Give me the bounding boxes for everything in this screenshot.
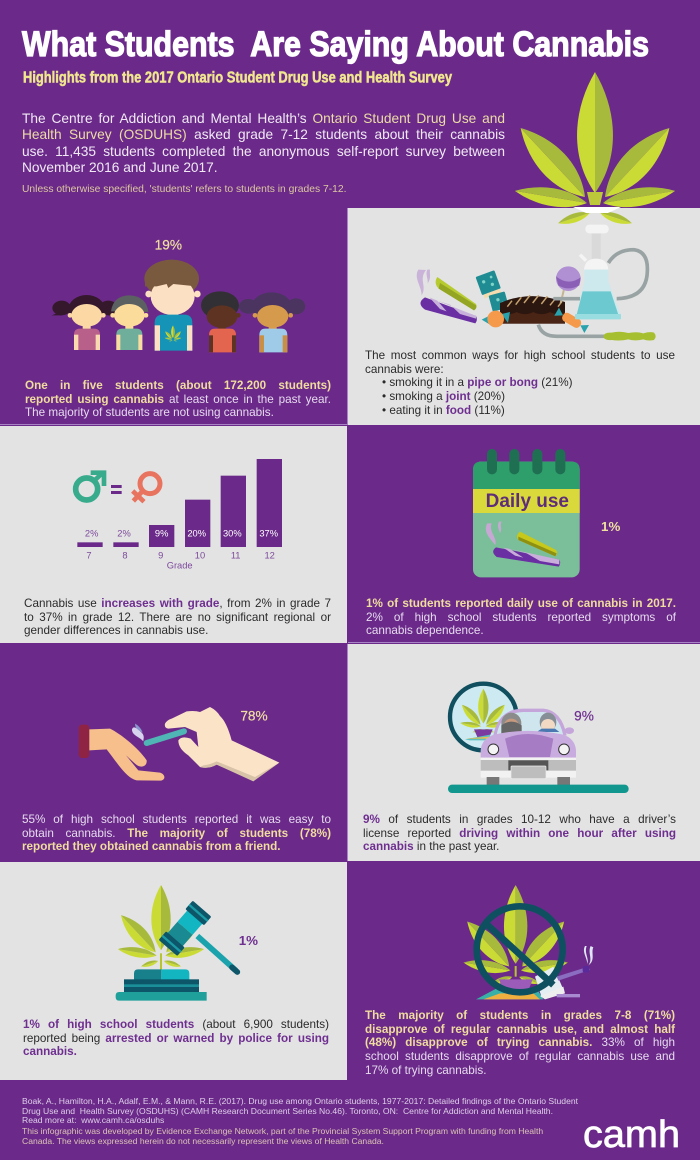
text: daily use: cannabis dependence. <box>366 624 484 637</box>
bar chart: cannabis use by grade: 12 <box>264 550 275 560</box>
panel: driving after using <box>348 644 700 861</box>
panel: ways of using cannabis <box>348 208 700 425</box>
illustration: five children <box>52 237 306 352</box>
panel: use by grade <box>0 426 348 643</box>
text: disapproval: disapprove of regular cannabis use, and almost half <box>365 1023 675 1036</box>
bar chart: cannabis use by grade: 9 <box>158 550 163 560</box>
text: driving after cannabis <box>363 813 676 853</box>
text: obtaining cannabis <box>22 813 331 853</box>
text: most common ways <box>365 349 675 417</box>
intro text block: The Centre for Addiction and Mental Health’s Ontario Student Drug Use and <box>22 111 505 126</box>
panel: disapproval <box>365 885 676 1077</box>
text: disapproval: (48%) disapprove of trying cannabis. 33% of high <box>365 1036 675 1049</box>
footer: citation <box>22 1096 578 1125</box>
subtitle: Highlights from the 2017 Ontario Student Drug Use and Health Survey <box>23 70 452 86</box>
panel: daily use <box>348 426 700 643</box>
bar chart: cannabis use by grade: 2% <box>117 529 131 539</box>
text: most common ways: • smoking it in a pipe or bong (21%) <box>382 376 572 389</box>
text: disapproval: The majority of students in grades 7-8 (71%) <box>365 1009 675 1022</box>
illustration: joint, edibles and hookah <box>416 224 656 340</box>
illustration: car with two students: 9% <box>574 709 594 724</box>
intro text block: November 2016 and June 2017. <box>22 160 218 175</box>
definition note: Unless otherwise specified, 'students' refers to students in grades 7-12. <box>22 184 346 195</box>
text: one in five students: reported using cannabis at least once in the past year. <box>25 393 331 406</box>
text: obtaining cannabis: 55% of high school students reported it was easy to <box>22 813 331 826</box>
icon: male equals female <box>72 470 162 504</box>
intro text block <box>22 111 505 175</box>
illustration: gavel and cannabis leaf: 1% <box>239 933 258 948</box>
illustration: car with two students <box>448 682 629 793</box>
text: driving after cannabis: cannabis in the past year. <box>363 840 499 853</box>
text: increases with grade: to 37% in grade 12. There are no significant regional or <box>24 611 331 624</box>
bar chart: cannabis use by grade: 20% <box>187 529 206 539</box>
text: obtaining cannabis: reported they obtained cannabis from a friend. <box>22 840 280 853</box>
text: driving after cannabis: license reported driving within one hour after using <box>363 827 676 840</box>
text: obtaining cannabis: obtain cannabis. The majority of students (78%) <box>22 827 331 840</box>
text: daily use: 1% of students reported daily use of cannabis in 2017. <box>366 597 676 610</box>
text: disapproval: 17% of trying cannabis. <box>365 1064 486 1077</box>
text: most common ways: • eating it in food (11%) <box>382 404 505 417</box>
text: increases with grade: Cannabis use increases with grade, from 2% in grade 7 <box>24 597 331 610</box>
bar chart: cannabis use by grade <box>77 459 282 570</box>
illustration: prohibited cannabis leaf <box>464 885 594 1000</box>
icon: daily use calendar: Daily use <box>486 491 569 512</box>
bar chart: cannabis use by grade: 10 <box>195 550 205 560</box>
text: disapproval <box>365 1009 676 1077</box>
bar chart: cannabis use by grade: 37% <box>259 529 278 539</box>
icon: daily use calendar: 1% <box>601 519 620 534</box>
bar chart: cannabis use by grade: 2% <box>85 529 98 539</box>
footer: funding note: Canada. The views expressed herein do not necessarily represent the views of Health Canada. <box>22 1136 384 1146</box>
bar chart: cannabis use by grade: 11 <box>231 550 241 560</box>
text: daily use: 2% of high school students reported symptoms of <box>366 611 676 624</box>
icon: large cannabis leaf <box>515 72 675 224</box>
illustration: five children: 19% <box>155 237 182 252</box>
panel: arrested or warned <box>0 862 348 1080</box>
text: most common ways: • smoking a joint (20%) <box>382 390 505 403</box>
text: increases with grade: gender differences in cannabis use. <box>24 624 208 637</box>
illustration: hands passing a joint: 78% <box>240 709 268 724</box>
text: daily use <box>366 597 676 637</box>
text: most common ways: cannabis were: <box>365 363 444 376</box>
footer: funding note <box>22 1126 543 1146</box>
intro text block: Health Survey (OSDUHS) asked grade 7-12 students about their cannabis <box>22 127 505 142</box>
text: arrested or warned <box>23 1018 329 1058</box>
text: arrested or warned: cannabis. <box>23 1045 77 1058</box>
footer: citation: Drug Use and Health Survey (OSDUHS) (CAMH Research Document Series No.46). Toronto, ON: Centre for Addiction and Mental Health. <box>22 1106 553 1116</box>
illustration: hands passing a joint <box>78 707 280 782</box>
bar chart: cannabis use by grade: 7 <box>86 550 92 560</box>
illustration: gavel and cannabis leaf <box>116 885 258 1001</box>
footer: funding note: This infographic was developed by Evidence Exchange Network, part of the Provincial System Support Program with funding from Health <box>22 1126 543 1136</box>
text: one in five students: One in five students (about 172,200 students) <box>25 379 331 392</box>
icon: daily use calendar <box>473 449 620 578</box>
footer: citation: Read more at: www.camh.ca/osduhs <box>22 1115 164 1125</box>
intro text block: use. 11,435 students completed the anonymous self-report survey between <box>22 144 505 159</box>
bar chart: cannabis use by grade: 9% <box>155 529 168 539</box>
bar chart: cannabis use by grade: 8 <box>122 550 128 560</box>
text: arrested or warned: 1% of high school students (about 6,900 students) <box>23 1018 329 1031</box>
footer: citation: Boak, A., Hamilton, H.A., Adalf, E.M., & Mann, R.E. (2017). Drug use among Ontario students, 1977-2017: Detailed findings of the Ontario Student <box>22 1096 578 1106</box>
text: one in five students: The majority of students are not using cannabis. <box>25 406 274 419</box>
logo: camh: camh <box>583 1114 680 1155</box>
text: increases with grade <box>24 597 331 637</box>
text: arrested or warned: reported being arrested or warned by police for using <box>23 1032 329 1045</box>
text: most common ways: The most common ways for high school students to use <box>365 349 675 362</box>
bar chart: cannabis use by grade: Grade <box>167 560 193 570</box>
text: one in five students <box>25 379 331 419</box>
bar chart: cannabis use by grade: 30% <box>223 529 242 539</box>
text: driving after cannabis: 9% of students in grades 10-12 who have a driver’s <box>363 813 676 826</box>
text: disapproval: school students disapprove of regular cannabis use and <box>365 1050 675 1063</box>
panel: past-year use <box>0 208 348 425</box>
panel: getting cannabis from friends <box>0 644 348 861</box>
